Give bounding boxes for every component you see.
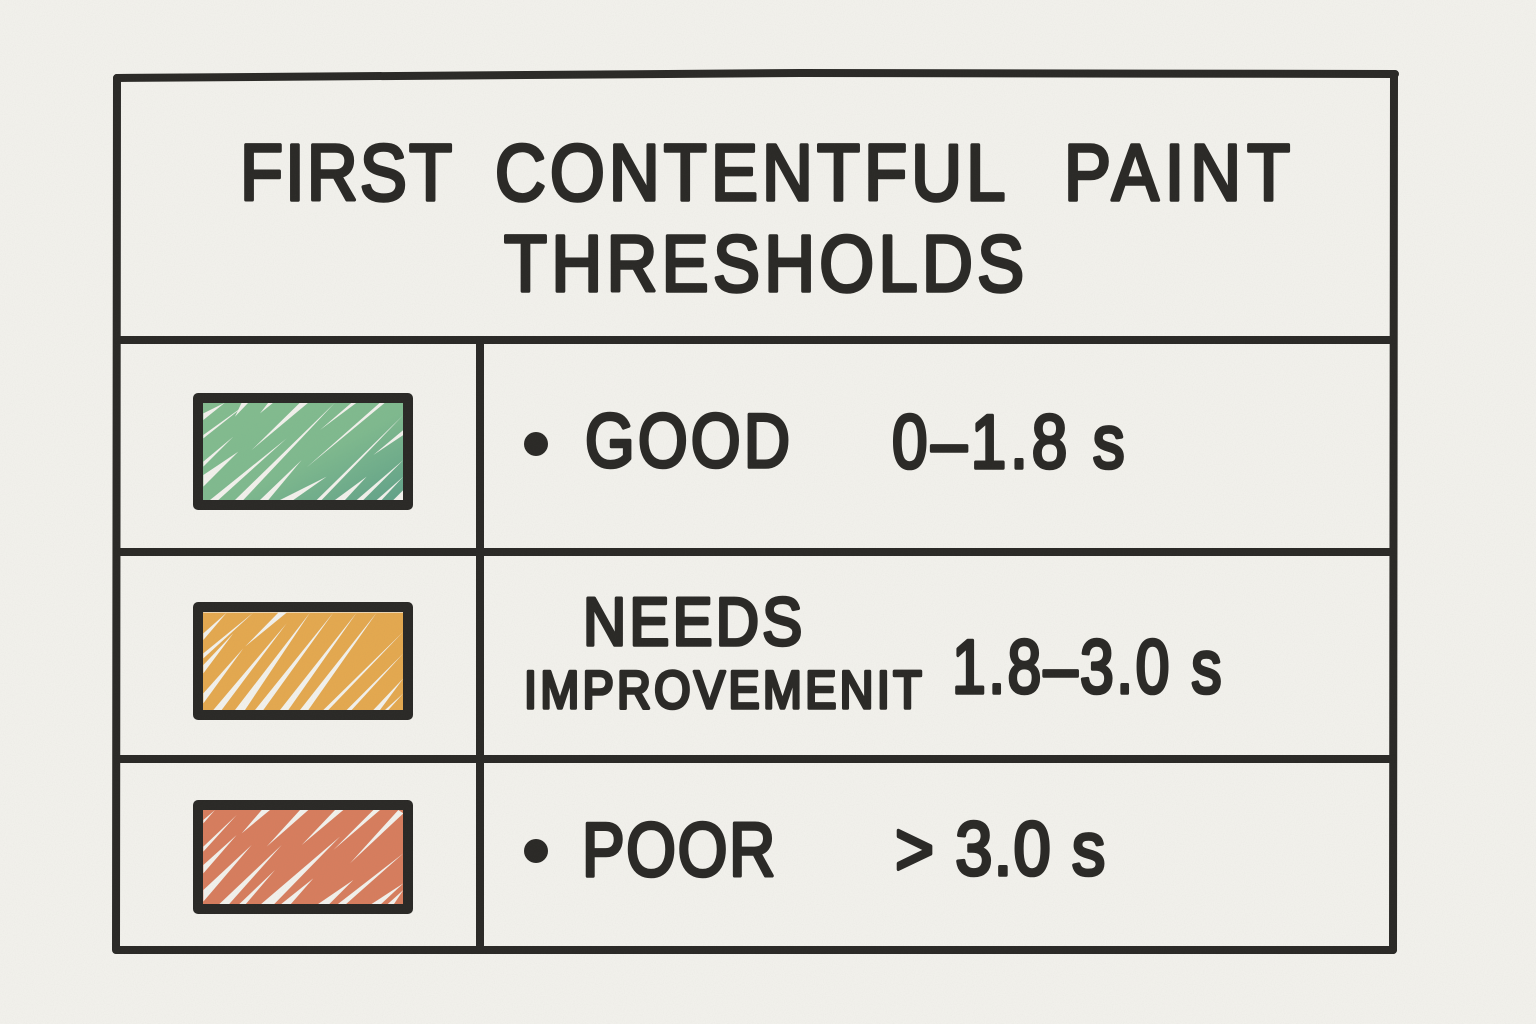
row: needs improvement: IMPROVEMENIT bbox=[524, 660, 922, 720]
title: PAINT bbox=[1064, 128, 1290, 217]
label: poor: POOR bbox=[582, 807, 775, 892]
title: FIRST bbox=[240, 128, 452, 217]
value: needs improvement: 1.8–3.0 s bbox=[952, 625, 1222, 710]
label: needs improvement: NEEDS bbox=[583, 583, 802, 660]
swatch: green hatched bbox=[198, 398, 408, 505]
table grid bbox=[116, 73, 1395, 950]
row: needs improvement bbox=[198, 583, 1222, 720]
title: CONTENTFUL bbox=[495, 128, 1005, 217]
value: poor: > 3.0 s bbox=[895, 807, 1105, 892]
bullet bbox=[524, 432, 548, 456]
bullet bbox=[524, 839, 548, 863]
row: poor bbox=[198, 805, 1105, 909]
label: good: GOOD bbox=[585, 398, 790, 483]
title: THRESHOLDS bbox=[504, 219, 1024, 308]
title bbox=[240, 128, 1290, 308]
swatch: red hatched bbox=[198, 805, 408, 909]
swatch: orange hatched bbox=[198, 607, 408, 715]
row: good bbox=[198, 398, 1125, 505]
value: good: 0–1.8 s bbox=[892, 399, 1125, 484]
